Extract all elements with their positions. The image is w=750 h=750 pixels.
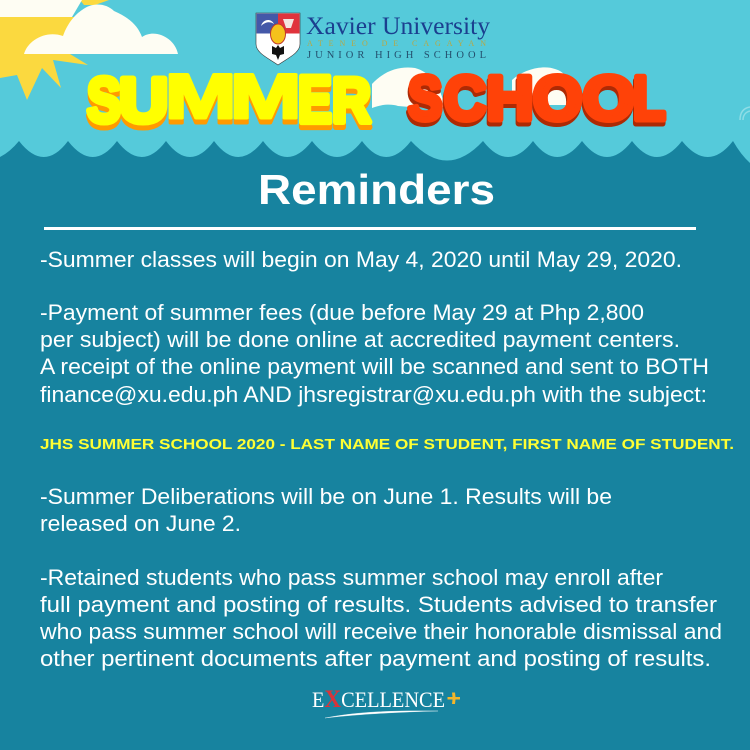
header: sky with scalloped wave edge [0,0,750,163]
title word: SCHOOL [408,63,666,134]
title word: SCHOOL: O [533,64,582,133]
text block: retained students: other pertinent documents after payment and posting of results. [40,646,711,671]
title word: SUMMER [87,61,371,137]
text block: deliberations [40,484,612,536]
text block: payment: -Payment of summer fees (due before May 29 at Php 2,800 [40,300,644,325]
title word: SUMMER: M [165,61,236,131]
swoosh [325,711,438,718]
title word: SCHOOL: H [486,64,534,133]
title word: SCHOOL: C [444,64,486,133]
text block: payment: A receipt of the online payment will be scanned and sent to BOTH [40,354,709,379]
logo: school name: JUNIOR HIGH SCHOOL [307,50,486,61]
title word: SCHOOL: S [408,64,442,134]
heading: Reminders: Reminders [258,166,495,213]
illustration: cloud top left [0,0,178,54]
text block: payment [40,300,709,407]
icon: plus [448,692,460,704]
text block: retained students: full payment and posting of results. Students advised to transfer [40,592,718,617]
text block: retained students [39,565,722,671]
title word: SUMMER: U [119,64,168,135]
logo: school name: ATENEO DE CAGAYAN [307,39,486,48]
title word: SUMMER: E [298,64,332,137]
text block: payment: finance@xu.edu.ph AND jhsregistrar@xu.edu.ph with the subject: [40,382,707,407]
text block: retained students: who pass summer school will receive their honorable dismissal and [39,619,722,644]
decoration: swirl at right [740,107,750,120]
text block: class dates: -Summer classes will begin on May 4, 2020 until May 29, 2020. [40,247,682,272]
text block: payment: per subject) will be done online at accredited payment centers. [40,327,680,352]
logo: Xavier University shield [256,13,300,65]
text block: email subject format: JHS SUMMER SCHOOL 2020 - LAST NAME OF STUDENT, FIRST NAME OF STUDENT. [40,437,734,453]
text block: deliberations: released on June 2. [40,511,241,536]
logo: school name [306,13,491,61]
title word: SCHOOL: O [583,63,635,133]
title word: SUMMER: S [87,66,121,136]
title word: SUMMER: R [332,66,371,136]
logo: Excellence+: EXCELLENCE [312,686,445,713]
logo: school name: Xavier University [306,13,491,40]
illustration: clouds behind SCHOOL [372,67,575,108]
divider under heading [44,227,696,230]
title word: SCHOOL: L [633,65,666,133]
text block: retained students: -Retained students who pass summer school may enroll after [40,565,664,590]
illustration: sun [0,0,109,100]
text block: deliberations: -Summer Deliberations will be on June 1. Results will be [40,484,612,509]
title word: SUMMER: M [230,61,301,131]
